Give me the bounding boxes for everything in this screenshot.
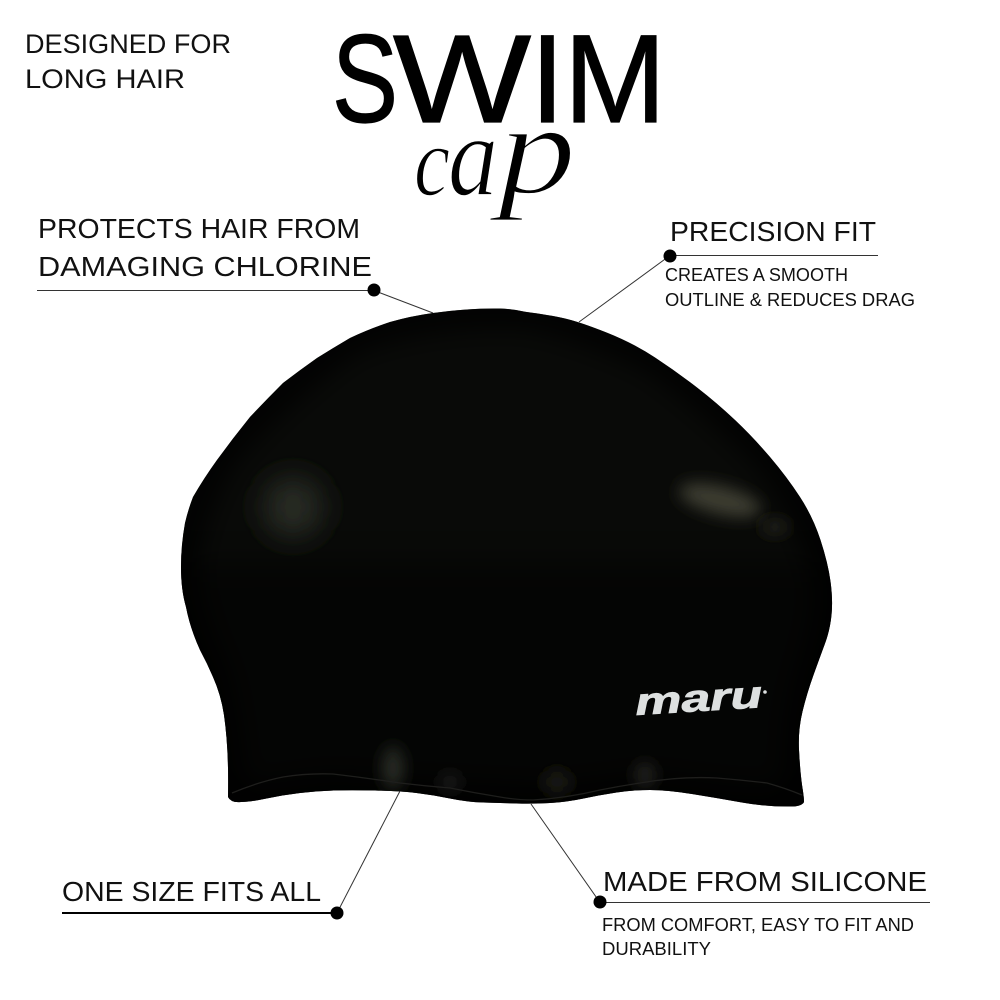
callout: protects hair	[37, 213, 433, 313]
title: swim: S	[332, 10, 398, 149]
logo: maru: maru	[634, 674, 763, 724]
subtitle: designed for long hair: LONG HAIR	[25, 64, 185, 94]
logo: maru	[634, 674, 767, 724]
title: swim	[332, 10, 666, 149]
title: swim: I	[530, 10, 565, 149]
title: cap script	[414, 78, 576, 222]
callout: precision fit	[579, 216, 915, 322]
title: swim: W	[393, 10, 531, 149]
callout: precision fit: OUTLINE & REDUCES DRAG	[665, 290, 915, 310]
callout: made from silicone: DURABILITY	[602, 939, 711, 959]
callout: one size fits all: ONE SIZE FITS ALL	[62, 876, 321, 907]
callout: made from silicone	[531, 804, 930, 959]
title: swim: M	[564, 10, 666, 149]
swim cap illustration	[150, 308, 850, 820]
callout: made from silicone: MADE FROM SILICONE	[603, 866, 927, 897]
callout: precision fit: PRECISION FIT	[670, 216, 876, 247]
callout: made from silicone: FROM COMFORT, EASY TO FIT AND	[602, 915, 914, 935]
subtitle: designed for long hair: DESIGNED FOR	[25, 29, 231, 59]
callout: one size fits all	[62, 791, 400, 920]
title: cap script: c	[414, 106, 450, 217]
callout: precision fit: CREATES A SMOOTH	[665, 265, 848, 285]
title: cap script: p	[488, 78, 576, 222]
subtitle: designed for long hair	[25, 29, 231, 94]
callout: protects hair: DAMAGING CHLORINE	[38, 251, 372, 282]
callout: protects hair: PROTECTS HAIR FROM	[38, 213, 360, 244]
title: cap script: a	[448, 93, 498, 220]
